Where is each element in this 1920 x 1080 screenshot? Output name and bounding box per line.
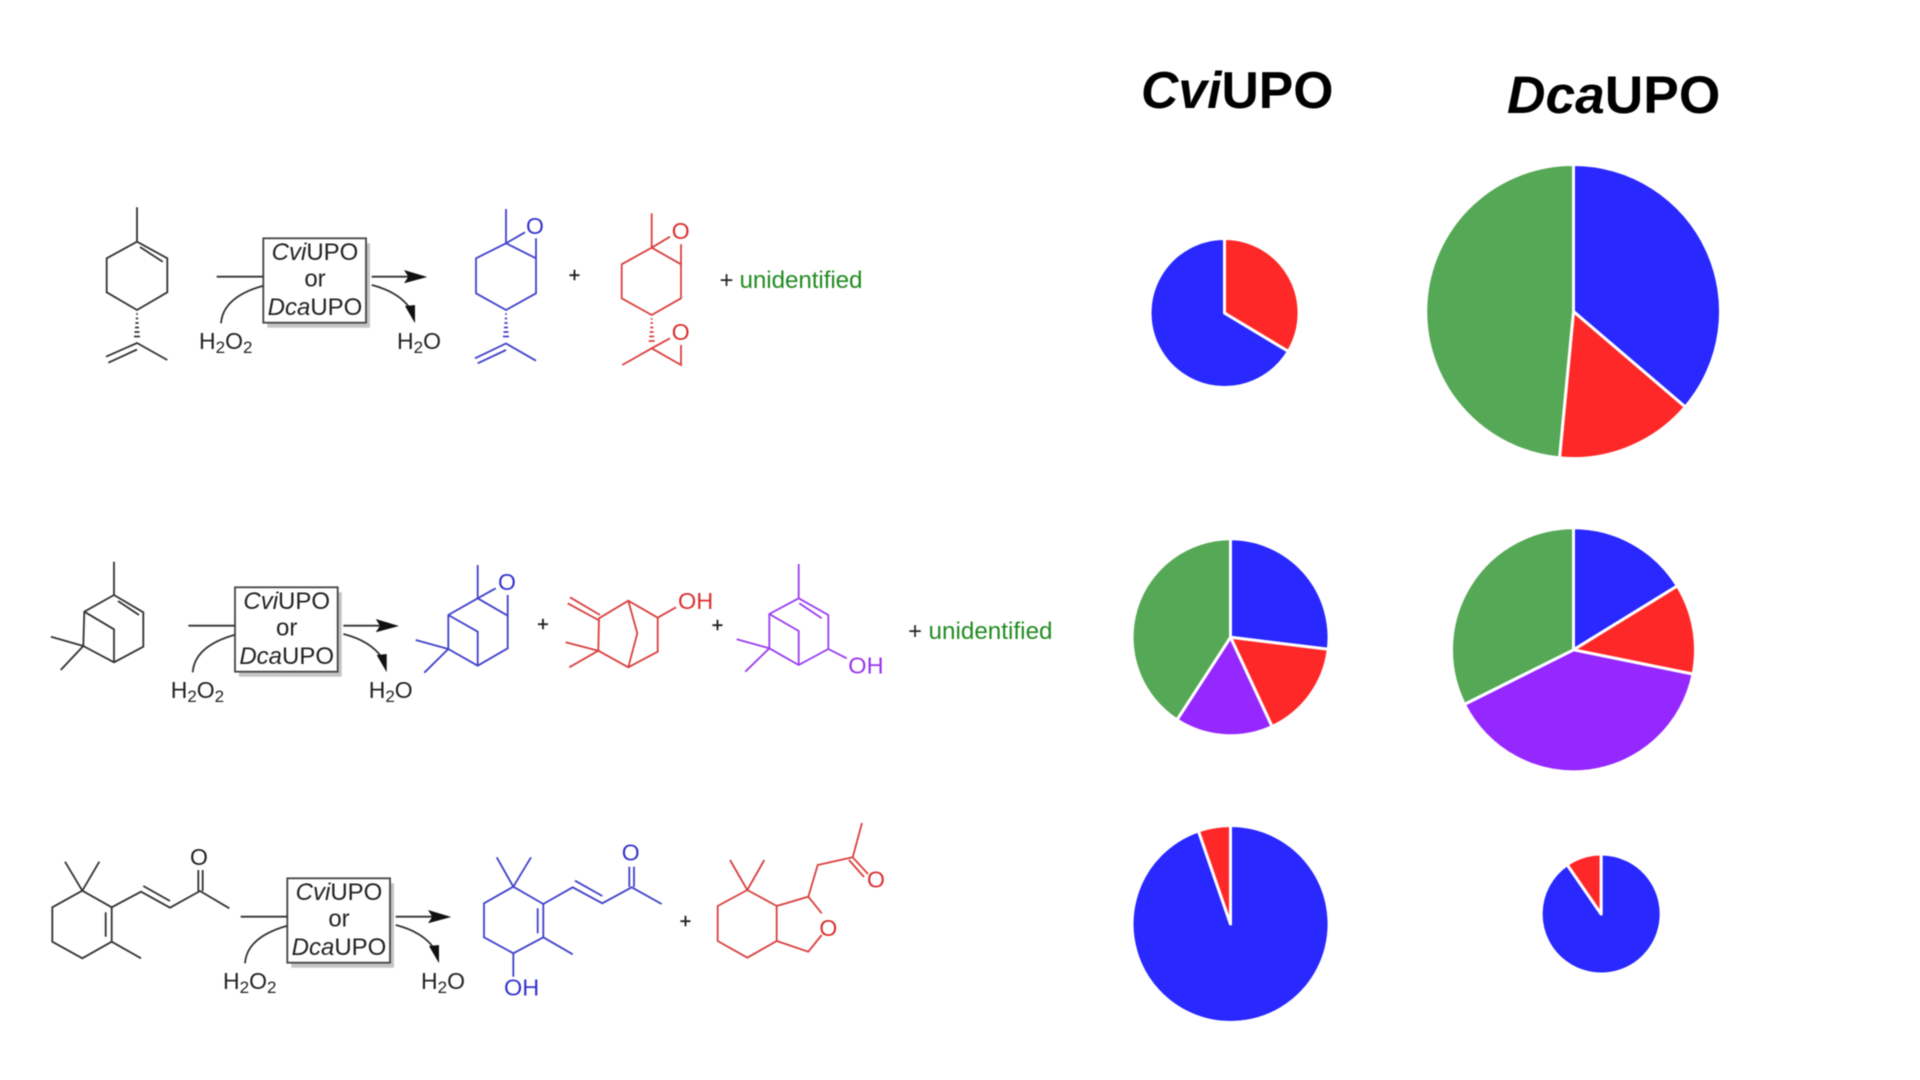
unidentified label: unidentified bbox=[740, 267, 862, 294]
pie chart: CviUPO pinene bbox=[1132, 539, 1329, 736]
enzyme box and arrows, reaction 1 bbox=[199, 238, 441, 357]
enzyme box and arrows, reaction 2: DcaUPO bbox=[239, 643, 334, 670]
enzyme box and arrows, reaction 2: O bbox=[197, 677, 215, 703]
title: CviUPO: CviUPO bbox=[1141, 61, 1333, 119]
enzyme box and arrows, reaction 2: 2 bbox=[385, 687, 395, 706]
enzyme box and arrows, reaction 2: H bbox=[171, 677, 187, 703]
pie chart: DcaUPO ionone bbox=[1541, 854, 1661, 974]
pie chart: CviUPO limonene bbox=[1150, 238, 1299, 387]
enzyme box and arrows, reaction 2: H bbox=[369, 677, 385, 703]
structure: blue hydroxy-ionone product: OH bbox=[504, 974, 539, 1000]
structure: red bicyclic ketone product: O bbox=[819, 915, 837, 941]
unidentified label: + bbox=[908, 619, 922, 645]
enzyme box and arrows, reaction 2: O bbox=[395, 677, 413, 703]
enzyme box and arrows, reaction 2: 2 bbox=[215, 687, 224, 706]
enzyme box and arrows, reaction 2: 2 bbox=[187, 687, 197, 706]
enzyme box and arrows, reaction 1: CviUPO bbox=[272, 239, 358, 266]
structure: blue limonene epoxide product: O bbox=[526, 213, 544, 239]
structure: beta-ionone substrate: O bbox=[190, 844, 208, 870]
unidentified label: + bbox=[720, 268, 733, 294]
enzyme box and arrows, reaction 3: or bbox=[328, 906, 350, 933]
title: DcaUPO: DcaUPO bbox=[1507, 66, 1720, 125]
plus sign: + bbox=[569, 265, 580, 287]
structure: limonene substrate bbox=[106, 207, 167, 363]
structure: blue hydroxy-ionone product: O bbox=[622, 840, 640, 866]
enzyme box and arrows, reaction 1: H bbox=[397, 328, 414, 354]
plus sign: + bbox=[537, 614, 549, 636]
enzyme box and arrows, reaction 1: 2 bbox=[216, 338, 225, 357]
plus sign: + bbox=[712, 615, 723, 637]
enzyme box and arrows, reaction 2: or bbox=[276, 615, 297, 642]
enzyme box and arrows, reaction 3: H bbox=[223, 968, 240, 994]
enzyme box and arrows, reaction 1: DcaUPO bbox=[268, 294, 362, 321]
enzyme box and arrows, reaction 3: 2 bbox=[267, 978, 276, 997]
enzyme box and arrows, reaction 1: 2 bbox=[243, 338, 252, 357]
reaction 1: limonene row bbox=[106, 207, 862, 365]
enzyme box and arrows, reaction 1: H bbox=[199, 328, 216, 354]
enzyme box and arrows, reaction 3: O bbox=[447, 968, 465, 994]
enzyme box and arrows, reaction 3: DcaUPO bbox=[292, 934, 386, 961]
structure: red limonene diepoxide product: O bbox=[672, 218, 690, 244]
plus sign: + bbox=[680, 911, 691, 933]
enzyme box and arrows, reaction 3 bbox=[223, 878, 465, 997]
structure: alpha-pinene substrate bbox=[51, 562, 143, 670]
enzyme box and arrows, reaction 3: 2 bbox=[240, 978, 249, 997]
pie chart: DcaUPO limonene bbox=[1426, 164, 1721, 459]
unidentified label: unidentified bbox=[928, 618, 1052, 645]
reaction 2: pinene row bbox=[51, 562, 1052, 706]
reaction 3: ionone row bbox=[52, 823, 885, 1000]
enzyme box and arrows, reaction 1: O bbox=[225, 328, 243, 354]
structure: blue hydroxy-ionone product bbox=[484, 840, 662, 1000]
enzyme box and arrows, reaction 3: O bbox=[249, 968, 267, 994]
structure: red bicyclic alcohol product: OH bbox=[678, 588, 713, 614]
structure: red bicyclic alcohol product bbox=[566, 588, 713, 667]
enzyme box and arrows, reaction 2: CviUPO bbox=[243, 588, 330, 615]
pie chart: DcaUPO pinene bbox=[1452, 528, 1696, 772]
structure: blue limonene epoxide product bbox=[475, 209, 544, 363]
structure: beta-ionone substrate bbox=[52, 844, 229, 958]
structure: red bicyclic ketone product: O bbox=[867, 866, 885, 892]
structure: purple verbenol product bbox=[737, 564, 884, 678]
pie chart: CviUPO ionone bbox=[1132, 826, 1329, 1022]
structure: red limonene diepoxide product: O bbox=[672, 319, 690, 345]
enzyme box and arrows, reaction 2 bbox=[171, 587, 413, 706]
structure: red bicyclic ketone product bbox=[718, 823, 885, 958]
enzyme box and arrows, reaction 3: 2 bbox=[438, 978, 447, 997]
enzyme box and arrows, reaction 3: H bbox=[421, 968, 438, 994]
enzyme box and arrows, reaction 1: O bbox=[423, 328, 441, 354]
structure: blue pinene epoxide product: O bbox=[498, 569, 516, 595]
enzyme box and arrows, reaction 1: 2 bbox=[414, 338, 423, 357]
structure: red limonene diepoxide product bbox=[622, 213, 690, 365]
structure: purple verbenol product: OH bbox=[848, 652, 884, 678]
enzyme box and arrows, reaction 1: or bbox=[304, 266, 326, 293]
structure: blue pinene epoxide product bbox=[416, 565, 516, 673]
enzyme box and arrows, reaction 3: CviUPO bbox=[296, 879, 382, 906]
